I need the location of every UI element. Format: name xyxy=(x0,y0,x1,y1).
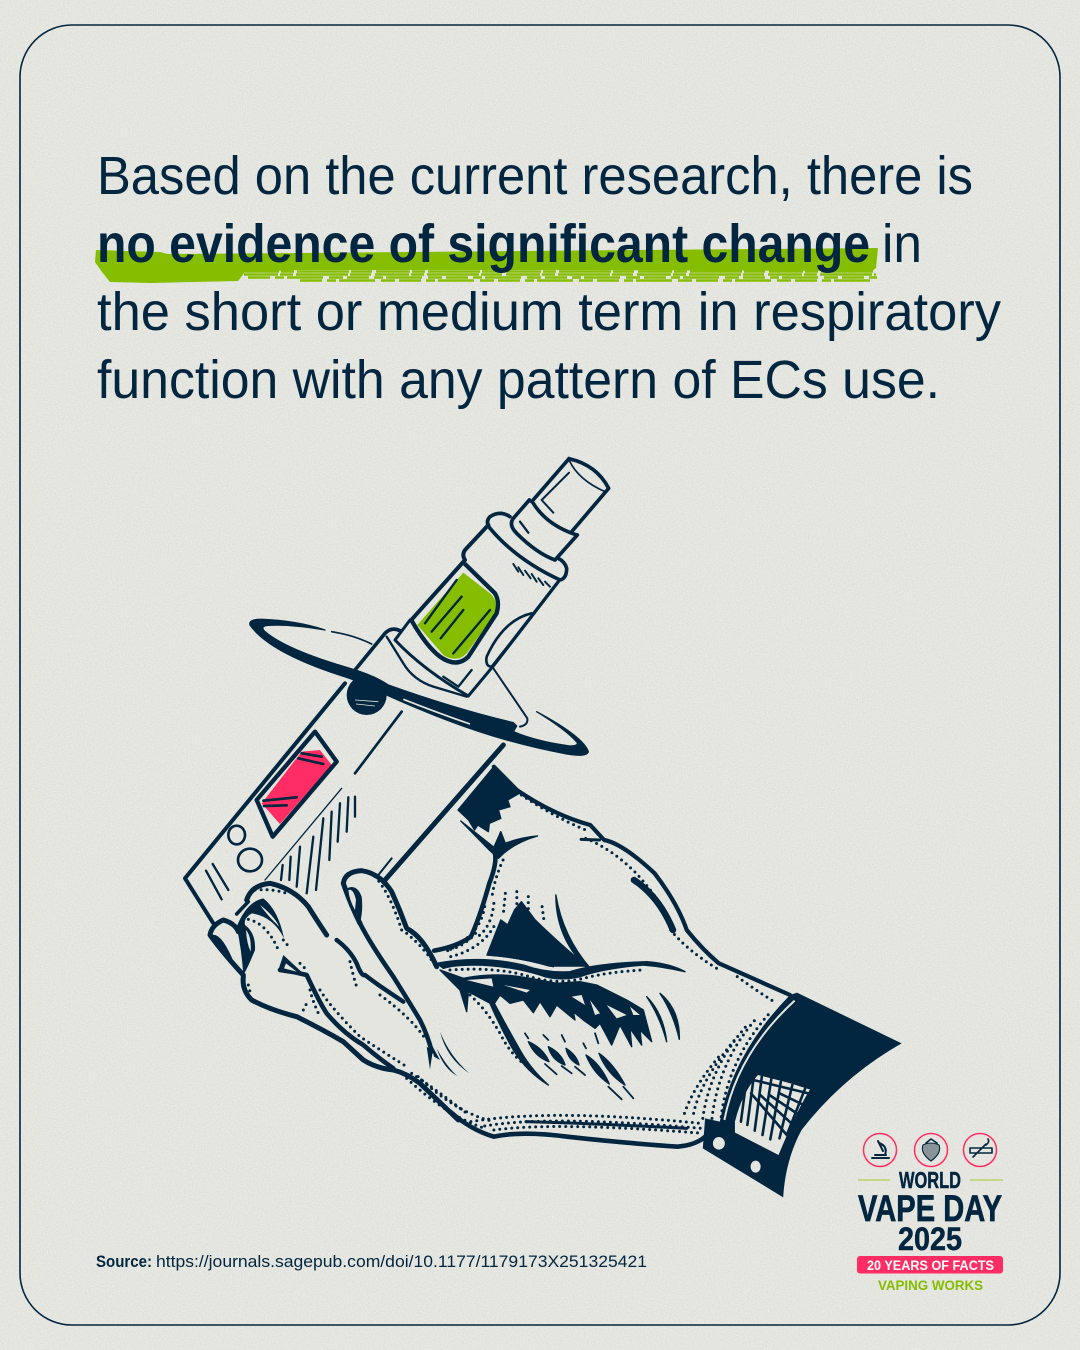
halftone dots upper palm xyxy=(443,795,774,1002)
pink screen xyxy=(262,750,332,824)
vaping works tagline: VAPING WORKS xyxy=(878,1277,983,1293)
hand: palm shading xyxy=(437,954,685,1099)
green brush highlight xyxy=(95,248,878,283)
headline: Based on the current research, there is xyxy=(97,146,973,206)
fingernail xyxy=(210,920,243,975)
thumb shadow xyxy=(487,902,587,966)
lower finger contour xyxy=(243,977,458,1120)
source line: Source: xyxy=(96,1253,152,1271)
icon: strawberry xyxy=(914,1134,948,1166)
cuff xyxy=(703,993,902,1197)
device body xyxy=(185,629,503,923)
icon: no cigarette xyxy=(964,1134,996,1166)
dark wrist patch xyxy=(458,767,519,832)
vape device xyxy=(185,459,609,923)
tank body xyxy=(387,525,558,727)
vapour ring xyxy=(250,619,588,755)
logo: World Vape Day 2025 xyxy=(857,1134,1003,1293)
source line: https://journals.sagepub.com/doi/10.1177/1179173X251325421 xyxy=(156,1253,647,1271)
logo wordmark: 2025 xyxy=(898,1221,962,1257)
logo rules xyxy=(858,1179,1003,1181)
cuff lining hatch xyxy=(735,1075,811,1155)
green tank window xyxy=(417,573,496,659)
headline xyxy=(97,146,1001,410)
logo wordmark: VAPE DAY xyxy=(858,1188,1002,1229)
headline: the short or medium term in respiratory xyxy=(97,282,1001,342)
drip tip xyxy=(487,459,609,580)
illustration: hand holding vape xyxy=(185,459,902,1197)
pink badge: 20 YEARS OF FACTS xyxy=(867,1257,994,1273)
icon: microscope xyxy=(864,1134,896,1166)
finger halftone xyxy=(248,877,467,1113)
logo wordmark: WORLD xyxy=(899,1167,961,1193)
hand: upper contour, palm and cuff xyxy=(407,767,902,1197)
headline: in xyxy=(882,214,922,274)
hand contour xyxy=(494,767,790,995)
lower hand contour xyxy=(450,1112,705,1147)
control knob xyxy=(347,675,387,715)
logo wordmark xyxy=(858,1167,1002,1257)
hand: fingers xyxy=(210,870,469,1120)
halftone dots near cuff xyxy=(407,1013,769,1133)
thumb web xyxy=(434,850,495,951)
headline: function with any pattern of ECs use. xyxy=(97,350,940,410)
headline: no evidence of significant change xyxy=(97,214,870,274)
